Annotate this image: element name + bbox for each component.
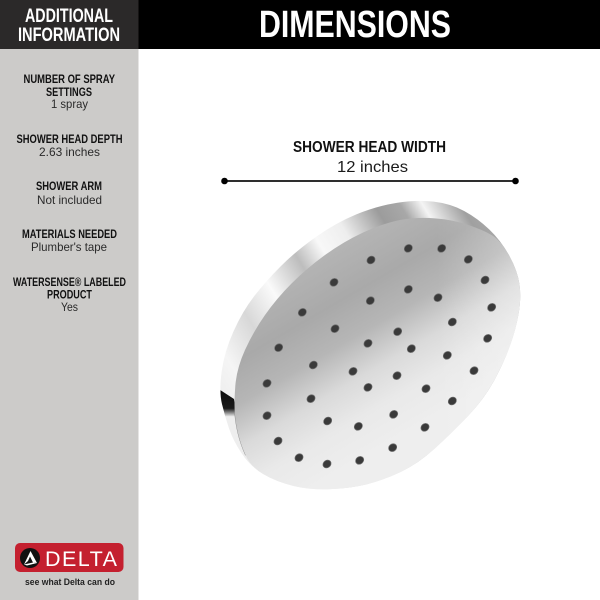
info: shower arm [36, 181, 102, 207]
tagline: see what Delta can do [25, 577, 115, 587]
info: watersense labeled product: PRODUCT [47, 290, 92, 302]
heading: additional information [18, 6, 120, 46]
info: watersense labeled product [13, 277, 126, 314]
info: materials needed [22, 229, 117, 254]
header bar: dimensions [138, 0, 600, 49]
arrow: width dimension line [221, 178, 519, 184]
heading: additional information: ADDITIONAL [25, 6, 113, 27]
info: watersense labeled product: WATERSENSE® LABELED [13, 277, 126, 289]
shower head face [235, 218, 520, 489]
dimension label: shower head width [293, 139, 446, 176]
info: number of spray settings: 1 spray [51, 97, 88, 111]
dimension label: shower head width: 12 inches [337, 159, 408, 176]
logo: delta [15, 543, 124, 587]
info: shower head depth: SHOWER HEAD DEPTH [16, 134, 122, 146]
info: shower head depth: 2.63 inches [39, 145, 100, 159]
info: watersense labeled product: Yes [61, 300, 78, 314]
info: number of spray settings: SETTINGS [46, 87, 92, 99]
logo: delta: DELTA [45, 547, 118, 571]
spray nozzles [261, 243, 497, 470]
info: shower arm: Not included [37, 193, 102, 207]
icon: delta emblem [20, 548, 40, 568]
heading: dimensions: DIMENSIONS [259, 4, 451, 46]
info: materials needed: MATERIALS NEEDED [22, 229, 117, 241]
heading: additional information: INFORMATION [18, 25, 120, 46]
info: shower head depth [16, 134, 122, 159]
info: number of spray settings: NUMBER OF SPRAY [24, 74, 115, 86]
shower head rim [217, 201, 520, 489]
shower head illustration [217, 201, 520, 489]
info: materials needed: Plumber's tape [31, 240, 107, 254]
info: number of spray settings [24, 74, 115, 111]
sidebar background [0, 49, 138, 600]
info: shower arm: SHOWER ARM [36, 181, 102, 193]
dimension label: shower head width: SHOWER HEAD WIDTH [293, 139, 446, 156]
header bar: additional information [0, 0, 138, 49]
